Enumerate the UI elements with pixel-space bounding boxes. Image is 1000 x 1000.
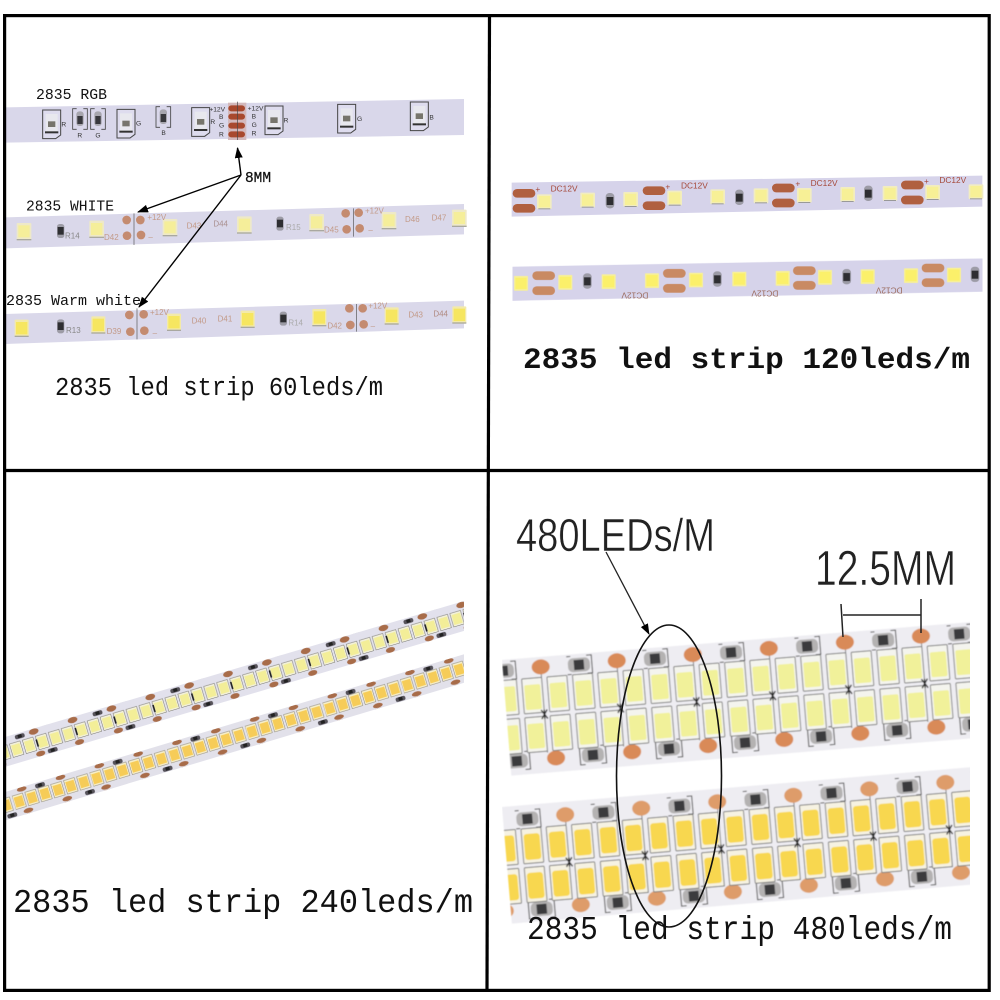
LED strip: 120 leds cool white: + <box>535 184 540 194</box>
panel: 480 leds per metre <box>502 509 990 949</box>
label: 8MM: 8MM <box>245 170 271 187</box>
panel: 240 leds per metre <box>0 597 487 923</box>
LED strip: 2835 white: – <box>368 226 373 235</box>
LED strip: 2835 RGB: B <box>161 130 166 137</box>
LED strip: 2835 warm white: – <box>371 322 376 331</box>
LED strip: 2835 warm white: R13 <box>66 326 81 335</box>
LED strip: 2835 warm white: D42 <box>327 322 343 331</box>
LED strip: 2835 RGB: R <box>61 122 66 129</box>
panel: 60 leds per metre <box>5 87 467 403</box>
heading: 480LEDs/M: 480LEDs/M <box>516 509 715 561</box>
LED strip: 2835 RGB: G <box>219 122 224 129</box>
LED strip: 2835 RGB: B <box>252 113 257 120</box>
LED strip: 2835 white: D42 <box>104 233 119 242</box>
LED strip: 120 leds warm white: DC12V <box>751 289 778 299</box>
LED strip: 2835 white: D43 <box>187 222 202 231</box>
LED strip: 120 leds cool white: DC12V <box>811 178 838 188</box>
LED strip: 2835 RGB: R <box>77 132 82 139</box>
LED strip: 120 leds cool white: DC12V <box>681 181 708 191</box>
LED strip: 2835 RGB: G <box>357 116 362 123</box>
LED strip: 2835 warm white: R14 <box>288 319 304 328</box>
caption: 480 leds per metre: 2835 led strip 480leds/m <box>527 912 952 949</box>
LED strip: 2835 white: R14 <box>65 231 80 240</box>
label: 2835 WHITE: 2835 WHITE <box>26 198 114 216</box>
caption: 60 leds per metre: 2835 led strip 60leds/m <box>55 374 383 403</box>
LED strip: 2835 RGB: R <box>252 131 257 138</box>
label: 2835 Warm white: 2835 Warm white <box>6 293 141 310</box>
LED strip: 2835 white: D47 <box>432 214 447 223</box>
LED strip: 2835 white: +12V <box>365 206 385 215</box>
LED strip: 2835 warm white: D43 <box>408 311 424 320</box>
LED strip: 2835 warm white: +12V <box>368 302 388 311</box>
label: 2835 RGB: 2835 RGB <box>36 87 107 104</box>
LED strip: 120 leds cool white: + <box>665 181 670 191</box>
LED strip: 2835 warm white <box>5 301 466 344</box>
LED strip: 2835 warm white: +12V <box>150 308 170 317</box>
LED strip: 2835 RGB: B <box>219 114 224 121</box>
LED strip: 120 leds cool white: + <box>924 176 929 186</box>
LED strip: 2835 white <box>5 204 467 248</box>
LED strip: 120 leds cool white: DC12V <box>551 183 578 193</box>
LED strip: 2835 RGB: G <box>252 122 257 129</box>
caption: 240 leds per metre: 2835 led strip 240leds/m <box>13 885 473 923</box>
LED strip: 2835 white: – <box>148 232 153 241</box>
LED strip: 2835 white: +12V <box>147 213 167 222</box>
LED strip: 2835 warm white: D41 <box>218 315 233 324</box>
caption: 120 leds per metre: 2835 led strip 120leds/m <box>523 344 970 378</box>
arrows: 8MM width indicators <box>138 148 241 307</box>
LED strip: 120 leds warm white <box>512 258 982 301</box>
LED strip: 120 leds warm white: DC12V <box>621 291 648 301</box>
LED strip: 2835 white: D44 <box>213 220 229 229</box>
arrow: pointer to ellipse <box>606 552 649 634</box>
LED strip: 2835 RGB: B <box>429 115 434 122</box>
LED strip: 2835 warm white: D44 <box>433 310 449 319</box>
LED strip: 2835 RGB: G <box>136 121 141 128</box>
LED strip: 2835 RGB: +12V <box>248 106 264 113</box>
LED strip: 2835 RGB: R <box>284 117 289 124</box>
panel: 120 leds per metre <box>512 175 983 378</box>
heading: 12.5MM: 12.5MM <box>815 542 956 596</box>
LED strip: 2835 RGB: +12V <box>209 107 226 114</box>
LED strip: 2835 RGB: R <box>219 132 224 139</box>
LED strip: 2835 warm white: D40 <box>192 317 207 326</box>
LED strip: 120 leds cool white <box>512 175 983 217</box>
ellipse: highlight of LEDs <box>616 625 722 927</box>
LED strip: 2835 RGB <box>5 99 464 143</box>
LED strip: 2835 white: D45 <box>324 226 339 235</box>
LED strip: 120 leds warm white: DC12V <box>875 286 903 296</box>
LED strip: 2835 white: D46 <box>405 215 420 224</box>
dimension bracket: 12.5MM <box>841 599 921 637</box>
LED strip: 2835 RGB: R <box>210 119 215 126</box>
LED strip: 2835 RGB: G <box>95 132 101 139</box>
LED strip: 2835 white: R15 <box>286 223 301 232</box>
LED strips: 480 leds cool and warm <box>502 621 990 924</box>
LED strip: 120 leds cool white: DC12V <box>939 175 967 185</box>
LED strips: 240 leds cool and warm <box>6 601 464 820</box>
LED strip: 2835 warm white: D39 <box>107 327 122 336</box>
LED strip: 2835 warm white: – <box>153 328 158 337</box>
LED strip: 120 leds cool white: + <box>795 179 800 189</box>
